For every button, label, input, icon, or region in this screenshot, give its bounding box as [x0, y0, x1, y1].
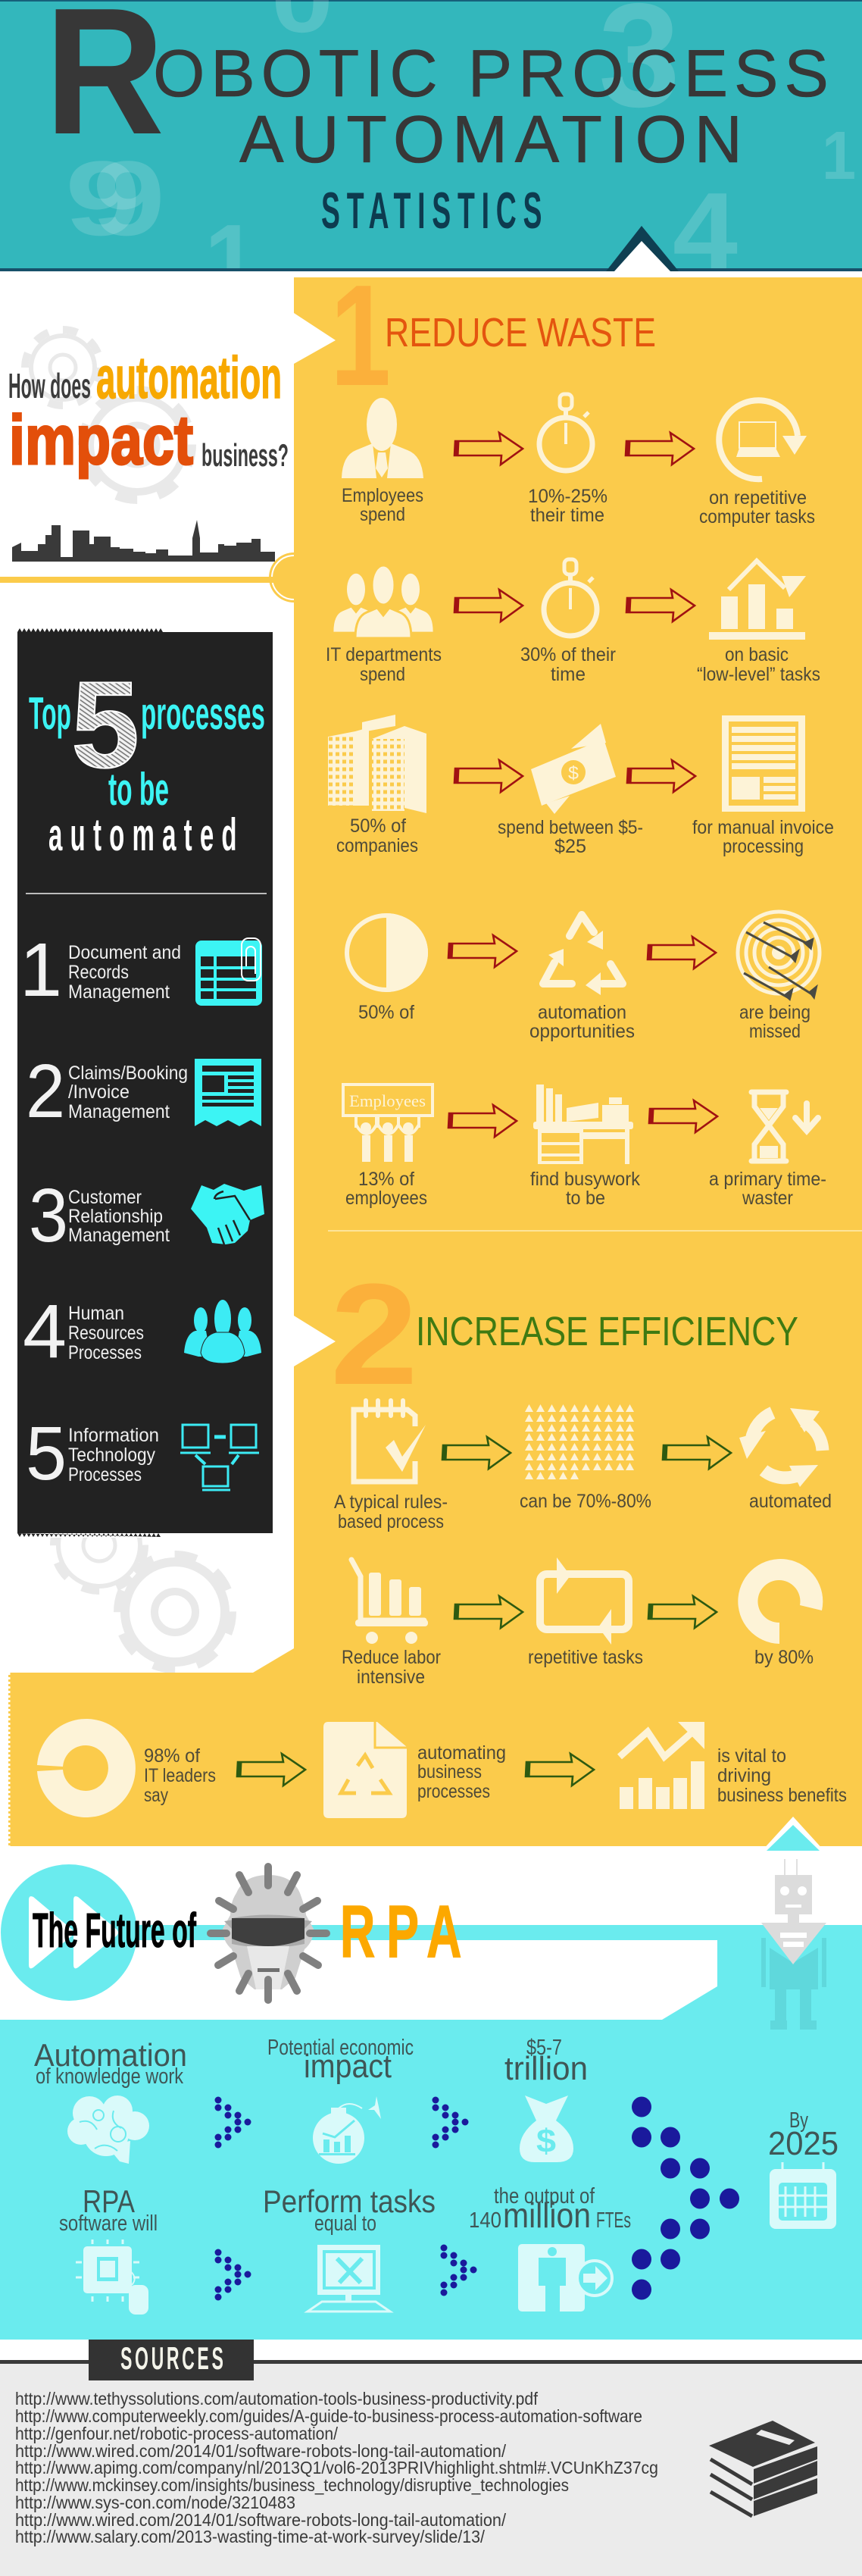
title: OBOTIC PROCESS: [153, 36, 829, 111]
icon: recycle: [543, 915, 623, 995]
text: employees: [345, 1188, 427, 1209]
item 1: Document and: [68, 942, 181, 963]
arrow: [454, 433, 523, 465]
text: on repetitive: [709, 487, 807, 509]
text: say: [144, 1785, 168, 1806]
block: perform tasks: Perform tasks: [263, 2183, 436, 2219]
source list: http://www.tethyssolutions.com/automation-tools-business-productivity.pdf: [15, 2389, 539, 2409]
arrow: [454, 590, 523, 621]
item 3: [29, 1173, 264, 1258]
icon: employees sign: Employees: [349, 1091, 426, 1110]
item 4: 4: [23, 1289, 67, 1374]
icon: 80% donut: [738, 1559, 823, 1644]
heading: sources: [89, 2340, 254, 2380]
text: A typical rules-: [334, 1491, 448, 1513]
text: are being: [739, 1002, 810, 1023]
text: spend: [360, 504, 405, 525]
arrow: dots: [215, 2249, 251, 2301]
block: rpa software will: RPA: [83, 2183, 135, 2219]
text: 10%-25%: [528, 486, 607, 507]
panel: cyan future background: [0, 1925, 862, 2340]
icon: background robot: [761, 1859, 826, 2030]
skyline: [12, 520, 275, 562]
text: can be 70%-80%: [520, 1491, 651, 1512]
arrow: [627, 760, 695, 792]
text: [417, 1742, 506, 1802]
icon: employee: [342, 398, 423, 478]
text: automated: [749, 1491, 832, 1512]
arrow: large dots: [632, 2096, 739, 2299]
text: time: [551, 664, 586, 685]
text: companies: [336, 835, 418, 856]
background numbers: 9: [92, 139, 165, 258]
icon: fast forward: [1, 1864, 137, 2001]
block: by 2025: 2025: [768, 2125, 839, 2162]
background numbers: 9: [65, 139, 141, 258]
block: by 2025: [768, 2108, 839, 2229]
text: [498, 817, 643, 857]
cyan pointer triangle: [762, 1817, 824, 1851]
text: repetitive tasks: [528, 1647, 643, 1668]
block: perform tasks: [263, 2183, 436, 2312]
item 5: Information: [68, 1425, 159, 1446]
heading: to be: [108, 764, 169, 815]
text: intensive: [357, 1667, 425, 1688]
icon: cycle arrows: [739, 1408, 823, 1487]
row: busywork: [343, 1085, 826, 1209]
icon: cycle with laptop: [719, 400, 807, 479]
arrow: [448, 935, 517, 967]
text: 50% of: [358, 1002, 414, 1023]
text: automating: [417, 1742, 506, 1764]
heading: 5: [71, 656, 139, 793]
heading: Top: [29, 688, 71, 739]
text: processing: [723, 836, 804, 857]
heading: automation: [96, 344, 282, 411]
heading: the future of rpa: [33, 1892, 461, 1973]
arrow: [648, 1596, 717, 1628]
yellow divider bar: [0, 577, 277, 583]
icon: people: [184, 1300, 261, 1363]
row: automation opportunities: [347, 912, 820, 1042]
text: by 80%: [754, 1647, 814, 1668]
text: Employees: [342, 485, 423, 506]
arrow: [442, 1437, 511, 1469]
block: potential economic impact: Potential economic: [267, 2036, 414, 2060]
background numbers: [70, 0, 854, 268]
item 5: 5: [26, 1411, 67, 1496]
row: rules-based process: [334, 1401, 832, 1532]
panel: top 5 processes: [17, 628, 273, 1537]
arrow: [626, 433, 694, 465]
icon: buildings: [328, 715, 426, 813]
arrow: [648, 937, 716, 969]
text: [144, 1745, 216, 1806]
row: reduce labor: [342, 1557, 823, 1688]
heading: reduce waste: REDUCE WASTE: [385, 310, 656, 355]
block: automation of knowledge work: [34, 2037, 187, 2164]
icon: money: [531, 724, 616, 814]
block: perform tasks: equal to: [314, 2211, 376, 2236]
text: business benefits: [717, 1785, 847, 1806]
heading: the future of rpa: The Future of: [33, 1903, 196, 1958]
text: automation: [538, 1002, 626, 1023]
block: 5-7 trillion: trillion: [504, 2050, 588, 2087]
heading: increase efficiency: [330, 1254, 798, 1415]
text: $25: [554, 836, 586, 857]
panel: sources: [0, 2340, 862, 2576]
text: [692, 817, 834, 857]
icon: bomb: [313, 2096, 381, 2164]
text: [739, 1002, 810, 1042]
source list: [15, 2389, 658, 2546]
text: [529, 1002, 635, 1042]
icon: stopwatch: [544, 559, 597, 636]
icon: lower gears: [50, 1538, 236, 1673]
block: potential economic impact: impact: [304, 2048, 392, 2085]
text: [697, 644, 820, 685]
row: IT leaders: [37, 1719, 847, 1818]
text: their time: [530, 505, 604, 526]
icon: growth chart: [620, 1722, 704, 1809]
heading: [29, 656, 265, 861]
heading: sources: SOURCES: [120, 2341, 223, 2377]
source list: http://www.salary.com/2013-wasting-time-at-work-survey/slide/13/: [15, 2527, 486, 2546]
header pointer: [606, 226, 679, 271]
arrow: [237, 1754, 305, 1786]
text: [334, 1491, 448, 1532]
heading: the future of rpa: RPA: [340, 1892, 461, 1973]
source list: http://www.wired.com/2014/01/software-robots-long-tail-automation/: [15, 2441, 507, 2461]
arrow: [663, 1437, 731, 1469]
icon: monitor with tools: [308, 2245, 390, 2312]
text: [345, 1169, 427, 1209]
text: [520, 644, 616, 685]
block: by 2025: By: [789, 2108, 808, 2133]
icon: cart: [351, 1560, 428, 1644]
icon: invoice document: [722, 715, 805, 812]
block: automation of knowledge work: Automation: [34, 2037, 187, 2073]
text: [336, 815, 418, 856]
icon: stopwatch: [539, 394, 592, 471]
background numbers: 1: [822, 118, 856, 194]
item 4: Processes: [68, 1342, 142, 1363]
source list: http://www.wired.com/2014/01/software-robots-long-tail-automation/: [15, 2510, 507, 2530]
text: a primary time-: [709, 1169, 826, 1190]
block: automation of knowledge work: of knowledge work: [36, 2064, 183, 2089]
source list: http://www.mckinsey.com/insights/business_technology/disruptive_technologies: [15, 2475, 569, 2495]
text: spend between $5-: [498, 817, 643, 838]
item 5: Technology: [68, 1445, 155, 1466]
block: output of 140 million FTEs: FTEs: [596, 2208, 631, 2233]
item 2: /Invoice: [68, 1081, 130, 1103]
row: 50% of companies: [328, 715, 834, 857]
icon: 98% donut: [37, 1719, 136, 1817]
item 4: Resources: [68, 1322, 144, 1344]
subtitle: STATISTICS: [321, 181, 542, 239]
arrow: [454, 760, 523, 792]
icon: people: [333, 565, 433, 638]
source list: http://www.computerweekly.com/guides/A-guide-to-business-process-automation-software: [15, 2406, 642, 2426]
arrow: [454, 1596, 523, 1628]
title: [45, 0, 829, 177]
text: IT leaders: [144, 1765, 216, 1786]
item 1: 1: [20, 928, 62, 1013]
text: [326, 644, 442, 685]
arrow: dots: [215, 2096, 251, 2148]
heading: impact: [9, 402, 193, 479]
icon: person and exit: [518, 2244, 612, 2312]
block: rpa software will: [59, 2183, 158, 2315]
text: to be: [566, 1188, 605, 1209]
block: 5-7 trillion: $5-7: [526, 2036, 562, 2060]
block: output of 140 million FTEs: [469, 2184, 631, 2312]
text: find busywork: [530, 1169, 640, 1190]
text: is vital to: [717, 1745, 786, 1767]
text: [528, 486, 607, 526]
source list: http://genfour.net/robotic-process-automation/: [15, 2424, 339, 2443]
heading: business?: [201, 437, 289, 473]
text: waster: [742, 1188, 793, 1209]
text: IT departments: [326, 644, 442, 665]
icon: handshake: [191, 1184, 264, 1244]
icon: bar chart house: [709, 561, 806, 640]
text: [530, 1169, 640, 1209]
icon: target with darts: [738, 912, 820, 1000]
heading: [8, 344, 289, 479]
arrow: dots: [441, 2245, 477, 2296]
text: for manual invoice: [692, 817, 834, 838]
icon: repeat: [540, 1557, 629, 1645]
title: AUTOMATION: [239, 102, 742, 177]
icon: desk: [533, 1085, 633, 1164]
block: output of 140 million FTEs: 140: [469, 2208, 501, 2233]
text: spend: [360, 664, 405, 685]
text: “low-level” tasks: [697, 664, 820, 685]
text: missed: [749, 1021, 801, 1042]
icon: money bag: $: [536, 2123, 556, 2160]
text: driving: [717, 1765, 771, 1786]
icon: money bag: [520, 2096, 573, 2162]
block: rpa software will: software will: [59, 2211, 158, 2236]
background numbers: 4: [673, 170, 738, 293]
icon: table with clip: [195, 938, 262, 1006]
arrow: [526, 1754, 594, 1786]
icon: network: [180, 1425, 259, 1490]
item 2: 2: [26, 1049, 65, 1134]
icon: employees sign: [343, 1085, 433, 1162]
source list: http://www.apimg.com/company/nl/2013Q1/vol6-2013PRIVhighlight.shtml#.VCUnKhZ37cg: [15, 2458, 658, 2477]
text: [709, 1169, 826, 1209]
text: [342, 1647, 441, 1688]
heading: processes: [141, 688, 265, 739]
icon: gears: [25, 330, 192, 499]
text: 98% of: [144, 1745, 200, 1767]
item 1: [20, 928, 262, 1013]
block: output of 140 million FTEs: the output of: [494, 2184, 595, 2208]
heading: increase efficiency: 2: [330, 1254, 418, 1415]
arrow: [626, 590, 695, 621]
icon: money: $: [568, 763, 579, 784]
item 4: Human: [68, 1303, 124, 1324]
text: Reduce labor: [342, 1647, 441, 1668]
item 3: Customer: [68, 1187, 142, 1208]
text: processes: [417, 1781, 490, 1802]
text: 30% of their: [520, 644, 616, 665]
icon: receipt: [195, 1059, 261, 1126]
heading: automated: [48, 810, 237, 861]
source list: http://www.sys-con.com/node/3210483: [15, 2493, 295, 2512]
block: 5-7 trillion: [504, 2036, 588, 2162]
item 2: Management: [68, 1101, 170, 1122]
text: based process: [338, 1511, 444, 1532]
row: employees spend: [342, 394, 815, 527]
heading: reduce waste: [330, 255, 656, 416]
item 2: [26, 1049, 261, 1134]
panel: how does automation impact business: [8, 330, 289, 562]
icon: books: [709, 2421, 817, 2516]
text: 50% of: [350, 815, 406, 837]
text: opportunities: [529, 1021, 635, 1042]
arrow: [649, 1100, 717, 1132]
icon: brain: [67, 2096, 149, 2164]
heading: reduce waste: 1: [330, 255, 391, 416]
text: [342, 485, 423, 525]
item 1: Management: [68, 981, 170, 1003]
icon: notepad: [354, 1401, 426, 1482]
text: [717, 1745, 847, 1806]
item 4: [23, 1289, 261, 1374]
text: [699, 487, 815, 527]
block: potential economic impact: [267, 2036, 414, 2164]
icon: chip and mouse: [76, 2240, 148, 2315]
item 3: Relationship: [68, 1206, 163, 1227]
icon: calendar: [770, 2162, 836, 2229]
arrow: dots: [432, 2096, 468, 2148]
item 3: 3: [29, 1173, 68, 1258]
background numbers: 1: [205, 203, 258, 318]
block: output of 140 million FTEs: million: [503, 2196, 591, 2235]
icon: triangle grid: [525, 1404, 634, 1479]
icon: robot head: [211, 1867, 326, 2000]
text: 13% of: [358, 1169, 414, 1190]
text: business: [417, 1761, 482, 1783]
heading: How does: [8, 366, 91, 405]
text: on basic: [725, 644, 789, 665]
item 5: [26, 1411, 259, 1496]
item 2: Claims/Booking: [68, 1063, 188, 1084]
item 5: Processes: [68, 1464, 142, 1485]
icon: hourglass: [751, 1092, 818, 1161]
panel: yellow statistics background: [8, 277, 862, 1846]
icon: recycled document: [323, 1722, 407, 1818]
text: computer tasks: [699, 506, 815, 527]
item 1: Records: [68, 962, 129, 983]
arrow: [448, 1105, 517, 1137]
panel: header: [0, 0, 862, 271]
icon: half circle: [347, 913, 428, 992]
item 3: Management: [68, 1225, 170, 1246]
row: IT departments: [326, 559, 820, 685]
